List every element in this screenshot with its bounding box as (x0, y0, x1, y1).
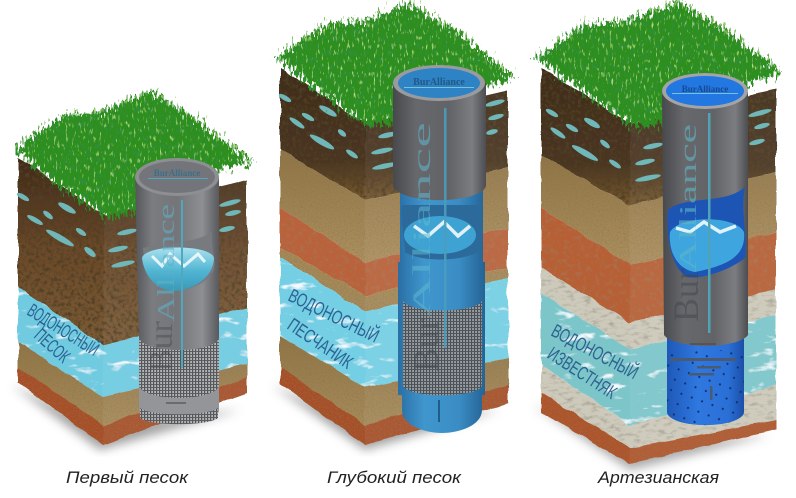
window with water (143, 232, 214, 291)
aquifer label second line: ИЗВЕСТНЯК (543, 344, 620, 404)
caption: Глубокий песок (327, 468, 462, 487)
pipe opening (662, 73, 748, 109)
well: deep sand (272, 3, 515, 487)
window with water (667, 187, 746, 278)
casing pipe (393, 65, 486, 433)
watermark: Bur (143, 320, 180, 372)
casing pipe: Alliance (676, 124, 702, 272)
casing pipe (135, 158, 219, 424)
well: artesian (533, 2, 782, 487)
well: first sand (12, 90, 252, 487)
aquifer label second line: ПЕСЧАНИК (283, 315, 356, 374)
window with water (402, 205, 482, 260)
casing pipe: BurAlliance (413, 77, 465, 88)
ground shadow (533, 405, 770, 470)
water pods (545, 107, 772, 183)
casing pipe (662, 73, 748, 425)
casing pipe: BurAlliance (682, 84, 728, 94)
water pods (16, 191, 241, 269)
watermark: Bur (406, 318, 446, 372)
aquifer label: ВОДОНОСНЫЙ (23, 300, 103, 361)
casing pipe: Alliance (154, 204, 180, 322)
caption: Первый песок (66, 468, 189, 487)
soil block (280, 68, 508, 445)
soil block (18, 158, 247, 445)
grass (14, 90, 252, 218)
grass (276, 3, 515, 126)
casing pipe: Alliance (409, 122, 436, 318)
grass (536, 2, 782, 128)
water pods (278, 92, 505, 171)
casing pipe: BurAlliance (154, 168, 200, 178)
ground shadow (272, 385, 500, 450)
watermark: Bur (666, 268, 706, 322)
aquifer label: ВОДОНОСНЫЙ (548, 320, 642, 384)
pipe opening (393, 65, 485, 101)
soil block (541, 68, 776, 464)
pipe opening (135, 158, 219, 196)
aquifer label second line: ПЕСОК (30, 325, 73, 367)
ground shadow (12, 385, 240, 450)
aquifer label: ВОДОНОСНЫЙ (285, 285, 383, 347)
caption: Артезианская (597, 468, 719, 487)
